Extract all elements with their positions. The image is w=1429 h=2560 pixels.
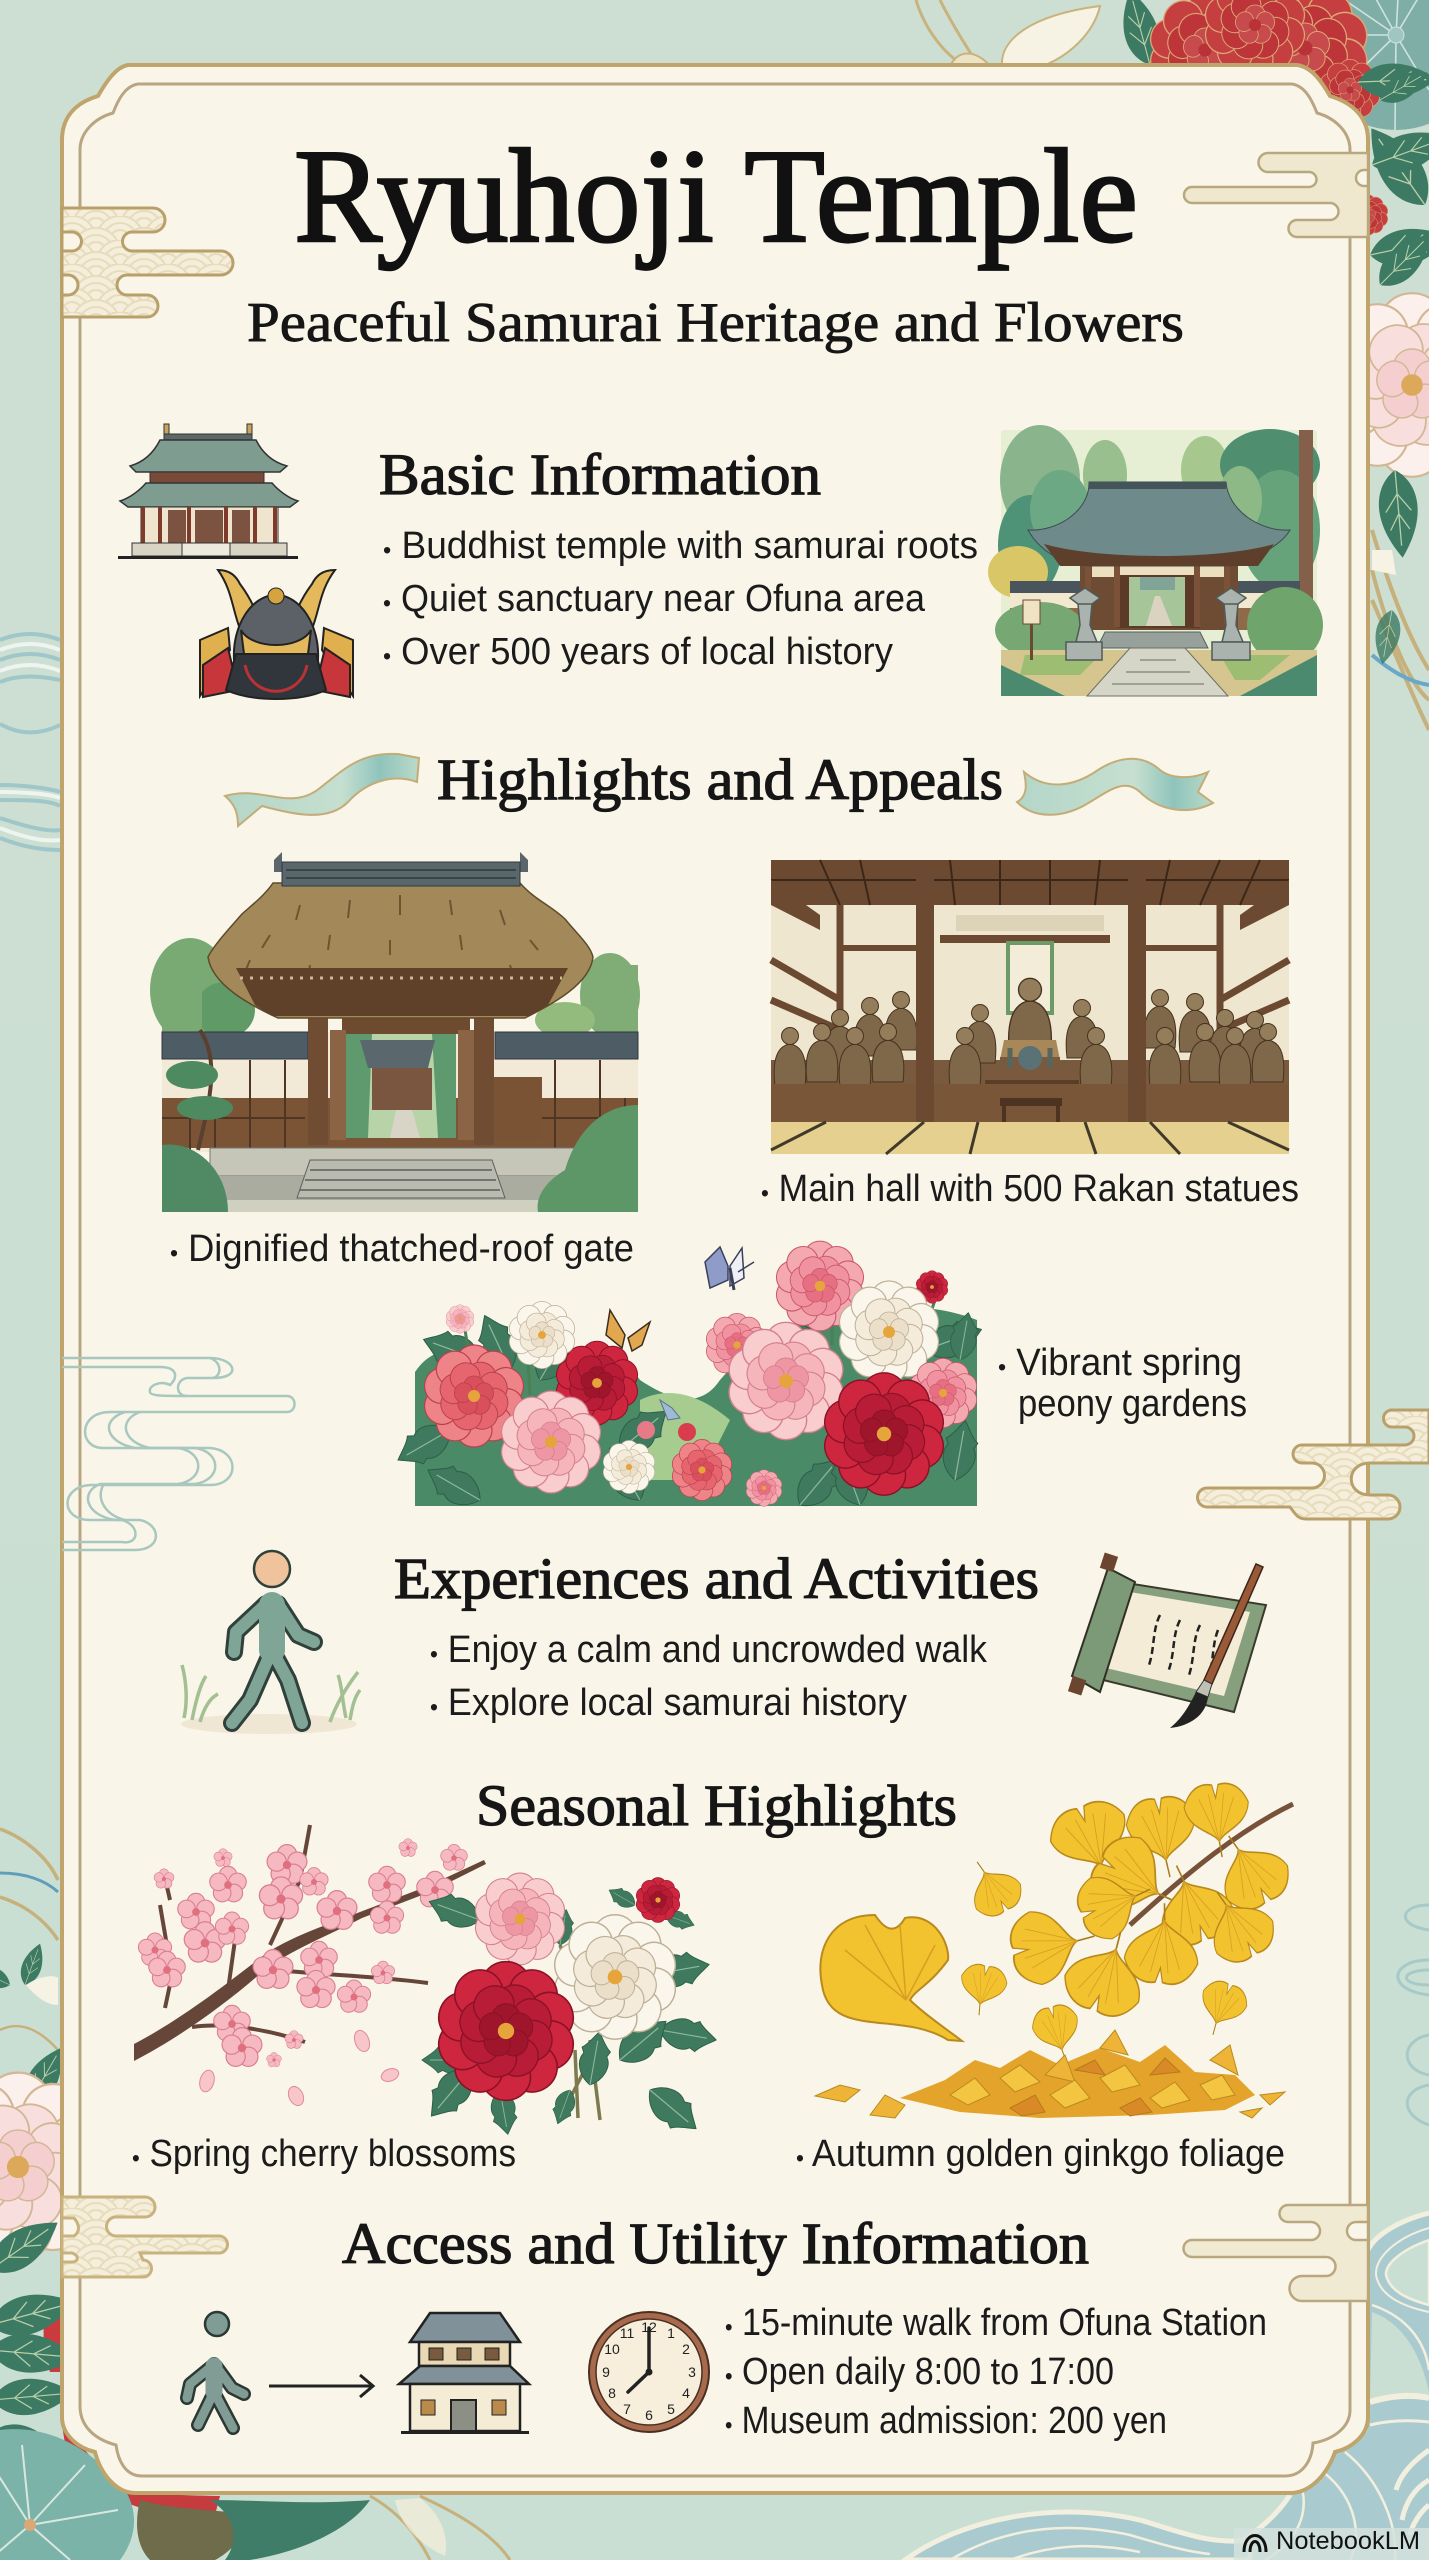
- bullet list: access information: • Museum admission: 200 yen: [725, 2400, 1167, 2442]
- icon: clock: [589, 2312, 709, 2432]
- cloud ornament: top-right: [1184, 153, 1368, 237]
- icon: clock: 6: [645, 2407, 653, 2423]
- bullet list: access information: • Open daily 8:00 to 17:00: [725, 2351, 1114, 2393]
- caption: peony gardens: peony gardens: [1018, 1383, 1247, 1425]
- caption: peony gardens: [998, 1342, 1247, 1425]
- decoration: top-right floral: [916, 0, 1429, 730]
- caption: peony gardens: • Vibrant spring: [998, 1342, 1242, 1384]
- cloud ornament: top-left: [62, 208, 233, 317]
- caption: thatched gate: • Dignified thatched-roof gate: [170, 1228, 634, 1270]
- bullet list: basic information: [383, 525, 978, 673]
- bullet list: basic information: • Quiet sanctuary near Ofuna area: [383, 578, 926, 620]
- icon: blue butterfly: [705, 1247, 754, 1290]
- icon: clock: 8: [608, 2385, 616, 2401]
- decoration: lower-left floral: [0, 1829, 510, 2560]
- section heading: Experiences and Activities: Experiences and Activities: [394, 1546, 1039, 1611]
- decoration: right lower lines: [1398, 1905, 1429, 2125]
- icon: walking figure with grass: [181, 1551, 360, 1734]
- illustration: ginkgo leaves: [815, 1781, 1298, 2118]
- icon: clock: 2: [682, 2341, 690, 2357]
- bullet list: basic information: • Over 500 years of local history: [383, 631, 893, 673]
- icon: clock: 4: [682, 2385, 690, 2401]
- bullet list: experiences: • Enjoy a calm and uncrowded walk: [430, 1629, 988, 1671]
- subtitle: Peaceful Samurai Heritage and Flowers: [247, 292, 1184, 354]
- icon: temple: [118, 424, 298, 559]
- arrow: [269, 2375, 373, 2397]
- cloud ornament: bottom-right: [1184, 2205, 1368, 2301]
- caption: cherry blossoms: • Spring cherry blossoms: [132, 2133, 516, 2175]
- bullet list: experiences: [430, 1629, 988, 1724]
- cloud ornament: bottom-left: [62, 2197, 228, 2277]
- icon: clock: 1: [667, 2325, 675, 2341]
- bullet list: experiences: • Explore local samurai history: [430, 1682, 907, 1724]
- watermark: NotebookLM: [1234, 2527, 1429, 2560]
- decoration: left waves: [0, 634, 60, 850]
- icon: clock: 9: [602, 2364, 610, 2380]
- watermark: NotebookLM: NotebookLM: [1276, 2527, 1420, 2555]
- section heading: Seasonal Highlights: Seasonal Highlights: [476, 1773, 957, 1838]
- icon: samurai helmet: [200, 570, 353, 699]
- illustration: peony bouquet: [419, 1872, 719, 2141]
- ribbon: right: [1017, 759, 1213, 815]
- icon: clock: 7: [623, 2401, 631, 2417]
- icon: clock: 11: [620, 2325, 634, 2341]
- title: Ryuhoji Temple: [294, 122, 1138, 270]
- image: thatched-roof gate: [150, 852, 640, 1212]
- image: main hall with Rakan statues: [771, 860, 1289, 1154]
- section heading: Basic Information: Basic Information: [379, 442, 821, 507]
- icon: small walking figure: [187, 2312, 244, 2428]
- icon: clock: 10: [604, 2341, 620, 2357]
- icon: small blue butterfly: [660, 1400, 680, 1420]
- cloud ornament: mid-left outline: [62, 1358, 294, 1550]
- decoration: bottom-right waves: [905, 2213, 1429, 2560]
- section heading: Highlights and Appeals: Highlights and Appeals: [437, 747, 1003, 812]
- icon: clock: 5: [667, 2401, 675, 2417]
- illustration: cherry blossom branch: [134, 1825, 486, 2108]
- icon: clock: 12: [641, 2319, 657, 2335]
- icon: orange butterfly: [606, 1310, 650, 1351]
- icon: station building: [399, 2313, 529, 2434]
- bullet list: access information: • 15-minute walk from Ofuna Station: [725, 2302, 1267, 2344]
- cloud ornament: mid-right: [1198, 1410, 1429, 1519]
- bullet list: basic information: • Buddhist temple with samurai roots: [383, 525, 978, 567]
- section heading: Access and Utility Information: Access and Utility Information: [342, 2211, 1089, 2276]
- caption: main hall: • Main hall with 500 Rakan statues: [761, 1168, 1299, 1210]
- ribbon: left: [225, 754, 419, 826]
- icon: clock: 3: [688, 2364, 696, 2380]
- illustration: peony garden: [390, 1240, 987, 1515]
- bullet list: access information: [725, 2302, 1267, 2442]
- caption: ginkgo foliage: • Autumn golden ginkgo foliage: [796, 2133, 1285, 2175]
- icon: scroll and brush: [1068, 1553, 1266, 1728]
- image: temple entrance: [988, 425, 1323, 696]
